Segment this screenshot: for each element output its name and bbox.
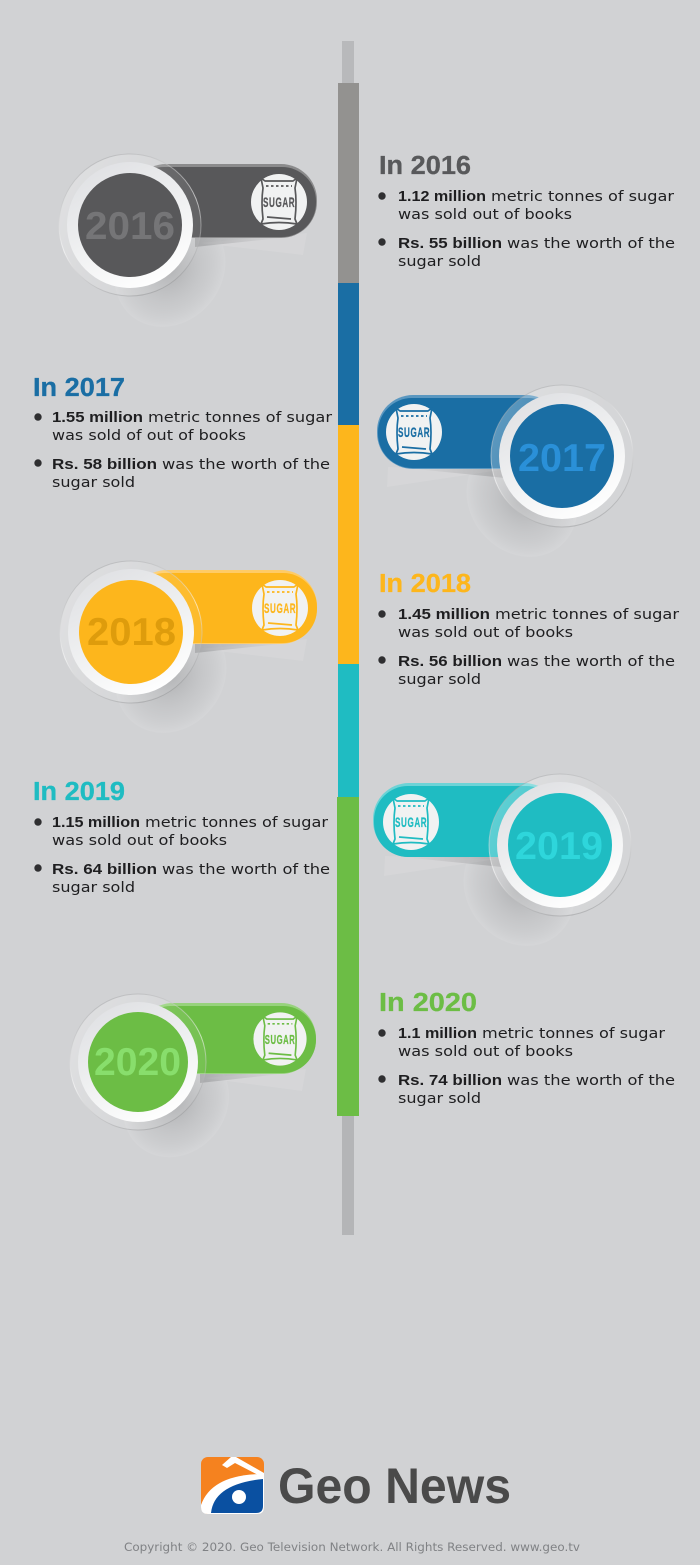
text block: In 2017: In 2017 xyxy=(33,374,125,402)
text block: In 2020 xyxy=(378,989,675,1107)
badge: 2020 xyxy=(70,994,316,1179)
text block: In 2017: was the worth of the xyxy=(162,457,330,473)
text block: In 2020: sugar sold xyxy=(398,1091,481,1107)
year disc 2017 xyxy=(491,385,633,527)
shadow ellipse 2017 xyxy=(444,421,600,579)
icon: sugar sack 2016: SUGAR xyxy=(263,196,295,211)
text block: In 2016: was sold out of books xyxy=(398,207,572,223)
pill 2016 xyxy=(130,164,317,238)
pill 2017 xyxy=(377,395,562,469)
text block: In 2017: was sold of out of books xyxy=(52,428,246,444)
text block: In 2017 xyxy=(33,374,332,491)
text block: In 2019: metric tonnes of sugar xyxy=(145,815,328,831)
text block: In 2020: Rs. 74 billion xyxy=(398,1072,502,1089)
year disc 2017: 2017 xyxy=(518,437,606,480)
shadow ellipse 2020 xyxy=(101,1027,251,1179)
text block: In 2019: was sold out of books xyxy=(52,833,227,849)
text block: In 2016: Rs. 55 billion xyxy=(398,235,502,252)
icon: sugar sack 2019: SUGAR xyxy=(395,816,427,831)
timeline bar xyxy=(337,41,359,1235)
text block: In 2018: In 2018 xyxy=(379,570,471,598)
text block: In 2016: was the worth of the xyxy=(507,236,675,252)
text block: In 2017: sugar sold xyxy=(52,475,135,491)
text block: In 2019: In 2019 xyxy=(33,778,125,806)
shadow ellipse 2016 xyxy=(92,191,248,349)
pill shadow 2017 xyxy=(387,467,505,487)
pill 2019 xyxy=(373,783,560,857)
year disc 2019: 2019 xyxy=(515,825,603,868)
copyright: Copyright © 2020. Geo Television Network. All Rights Reserved. www.geo.tv xyxy=(124,1540,580,1554)
pill shadow 2018 xyxy=(195,639,307,661)
text block: In 2016 xyxy=(378,152,675,270)
icon: sugar sack 2016 xyxy=(251,174,307,230)
logo icon: Geo News xyxy=(201,1457,264,1514)
badge: 2018 xyxy=(60,561,317,755)
icon: sugar sack 2018 xyxy=(252,580,308,636)
year disc 2020 xyxy=(70,994,206,1130)
icon: sugar sack 2018: SUGAR xyxy=(264,602,296,617)
shadow ellipse 2019 xyxy=(441,810,597,968)
text block: In 2020: was the worth of the xyxy=(507,1073,675,1089)
pill 2020 xyxy=(138,1003,316,1074)
icon: sugar sack 2020 xyxy=(253,1012,307,1066)
year disc 2018: 2018 xyxy=(87,611,176,654)
text block: In 2017: metric tonnes of sugar xyxy=(148,410,332,426)
text block: In 2017: Rs. 58 billion xyxy=(52,456,157,473)
text block: In 2019: Rs. 64 billion xyxy=(52,861,157,878)
text block: In 2018: 1.45 million xyxy=(398,606,490,623)
text block: In 2020: metric tonnes of sugar xyxy=(482,1026,665,1042)
text block: In 2018: Rs. 56 billion xyxy=(398,653,502,670)
icon: sugar sack 2019 xyxy=(383,794,439,850)
text block: In 2017: 1.55 million xyxy=(52,409,143,426)
text block: In 2019 xyxy=(33,778,330,896)
pill shadow 2020 xyxy=(200,1069,306,1091)
text block: In 2018: sugar sold xyxy=(398,672,481,688)
text block: In 2020: was sold out of books xyxy=(398,1044,573,1060)
text block: In 2019: sugar sold xyxy=(52,880,135,896)
badge: 2017 xyxy=(377,385,633,579)
year disc 2020: 2020 xyxy=(94,1041,181,1084)
pill shadow 2016 xyxy=(195,233,307,255)
badge: 2019 xyxy=(373,774,631,968)
year disc 2019 xyxy=(489,774,631,916)
text block: In 2016: 1.12 million xyxy=(398,188,486,205)
text block: In 2020: In 2020 xyxy=(379,989,477,1017)
icon: sugar sack 2020: SUGAR xyxy=(265,1033,295,1047)
icon: sugar sack 2017: SUGAR xyxy=(398,426,430,441)
text block: In 2018: metric tonnes of sugar xyxy=(495,607,679,623)
text block: In 2019: was the worth of the xyxy=(162,862,330,878)
year disc 2016 xyxy=(59,154,201,296)
text block: In 2016: In 2016 xyxy=(379,152,471,180)
year disc 2018 xyxy=(60,561,202,703)
pill shadow 2019 xyxy=(384,856,502,876)
text block: In 2016: sugar sold xyxy=(398,254,481,270)
text block: In 2018: was sold out of books xyxy=(398,625,573,641)
text block: In 2016: metric tonnes of sugar xyxy=(491,189,674,205)
year disc 2016: 2016 xyxy=(85,205,175,248)
badge: 2016 xyxy=(59,154,317,349)
text block: In 2019: 1.15 million xyxy=(52,814,140,831)
logo wordmark: Geo News xyxy=(278,1458,511,1514)
text block: In 2018: was the worth of the xyxy=(507,654,675,670)
text block: In 2018 xyxy=(378,570,679,688)
text block: In 2020: 1.1 million xyxy=(398,1025,477,1042)
shadow ellipse 2018 xyxy=(93,597,249,755)
pill 2018 xyxy=(131,570,317,644)
icon: sugar sack 2017 xyxy=(386,404,442,460)
